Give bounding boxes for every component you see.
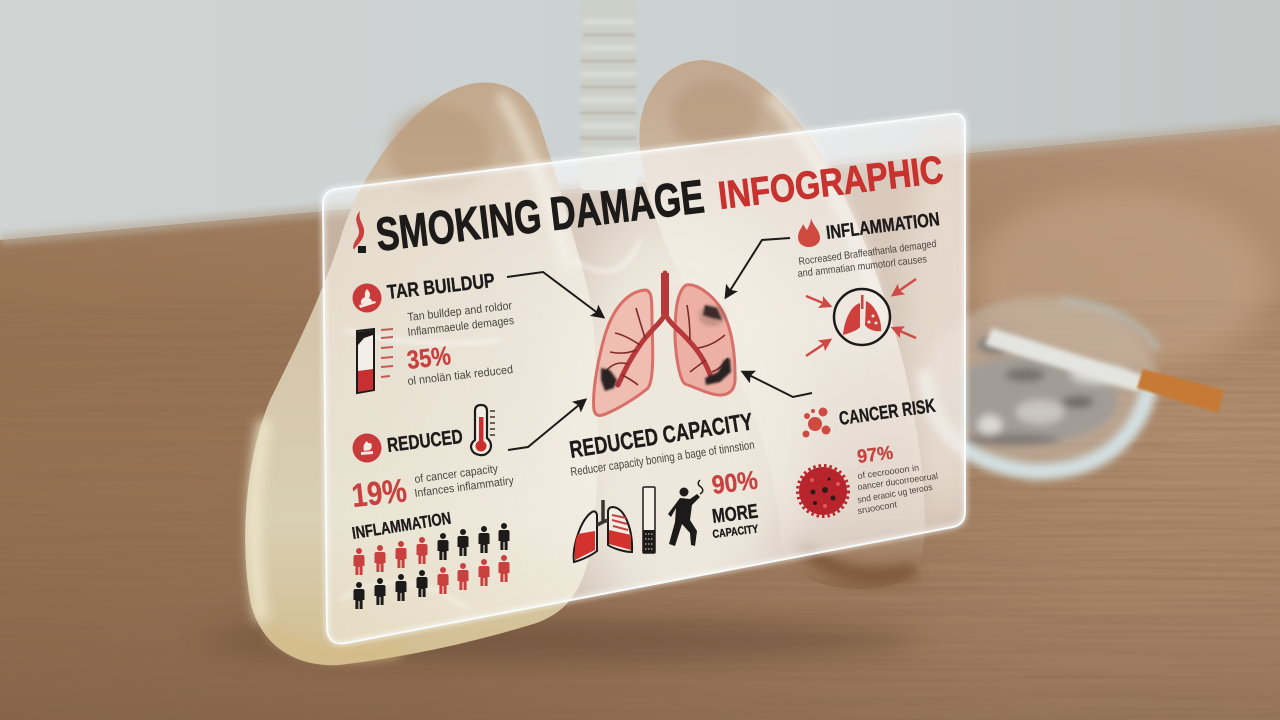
pictogram row 2 — [354, 555, 510, 609]
trachea and bronchi — [618, 273, 712, 385]
tar description: Inflammaeule demages — [407, 315, 515, 339]
tar description — [407, 300, 515, 339]
inflammation description — [797, 238, 937, 280]
section: tar buildup — [352, 270, 515, 393]
inflammation description: Rocreased Braffeathanla demaged — [798, 238, 937, 268]
icon: small lungs comparison — [574, 500, 632, 562]
reduced description — [414, 463, 515, 500]
ashtray with cigarette — [922, 297, 1224, 473]
glass highlights — [254, 80, 915, 654]
section: inflammation: INFLAMMATION — [825, 209, 941, 244]
icon: thermometer — [471, 405, 495, 455]
inflammation description: and ammatian mumotorl causes — [797, 253, 928, 280]
cancer description: of cecroooon in — [857, 462, 920, 481]
title: SMOKING DAMAGE — [373, 169, 707, 261]
section: reduced: REDUCED — [386, 426, 464, 457]
glass panel — [323, 114, 985, 643]
icon: smoke and cigarette — [353, 211, 366, 253]
icon: tar badge — [352, 284, 382, 312]
section: tar buildup: ol nnolän tiak reduced — [407, 364, 514, 388]
icon: smoking person — [668, 480, 703, 546]
glass panel: CAPACITY — [712, 523, 759, 541]
section: inflammation pictogram — [351, 509, 510, 609]
section: tar buildup: 35% — [405, 340, 452, 375]
pictogram row 1 — [354, 523, 510, 575]
reduced capacity description: Reducer capacity boning a bage of tinnstion — [569, 438, 755, 479]
glass trachea — [580, 0, 637, 190]
section: tar buildup: TAR BUILDUP — [386, 270, 496, 304]
icon: tar level gauge — [357, 329, 393, 393]
icon: cigarette — [643, 487, 655, 553]
left lung — [594, 290, 653, 416]
right lung — [675, 285, 735, 395]
arrow: inflammation to lungs — [726, 238, 790, 297]
arrow: cancer to lungs — [743, 372, 812, 397]
title: INFOGRAPHIC — [716, 148, 945, 218]
icon: reduced badge — [352, 434, 382, 462]
section: inflammation — [797, 209, 941, 356]
section: cancer risk: 97% — [856, 443, 894, 468]
cancer description — [857, 462, 938, 516]
section: reduced — [350, 405, 515, 514]
central damaged lungs — [594, 273, 735, 416]
soot patches — [601, 305, 731, 391]
glass panel: MORE — [711, 501, 759, 528]
cancer description: oancer ducorroeorual — [857, 471, 938, 492]
icon: cancer cell — [798, 466, 848, 516]
reduced description: of cancer capacity — [414, 463, 499, 486]
icon: cancer cells — [802, 408, 830, 438]
section: cancer risk — [798, 396, 938, 516]
reduced description: Infances inflammatiry — [414, 475, 515, 500]
cancer description: sruoocont — [857, 499, 898, 516]
section: cancer risk: CANCER RISK — [838, 396, 937, 430]
glass panel: 90% — [710, 465, 759, 500]
heading: reduced capacity: REDUCED CAPACITY — [568, 408, 755, 464]
arrow: tar to lungs — [507, 272, 603, 317]
right glass lobe — [639, 60, 925, 589]
cancer description: snd eraoic ug teroos — [857, 482, 934, 505]
left glass lobe — [245, 83, 598, 665]
section: inflammation pictogram: INFLAMMATION — [351, 509, 452, 543]
glass lung model — [245, 0, 925, 665]
tar description: Tan bulldep and roldor — [407, 300, 513, 324]
arrow: reduced to lungs — [508, 400, 585, 450]
section: reduced: 19% — [350, 471, 408, 514]
icon: flame — [798, 218, 820, 247]
icon: lung in circle with arrows — [806, 279, 916, 356]
